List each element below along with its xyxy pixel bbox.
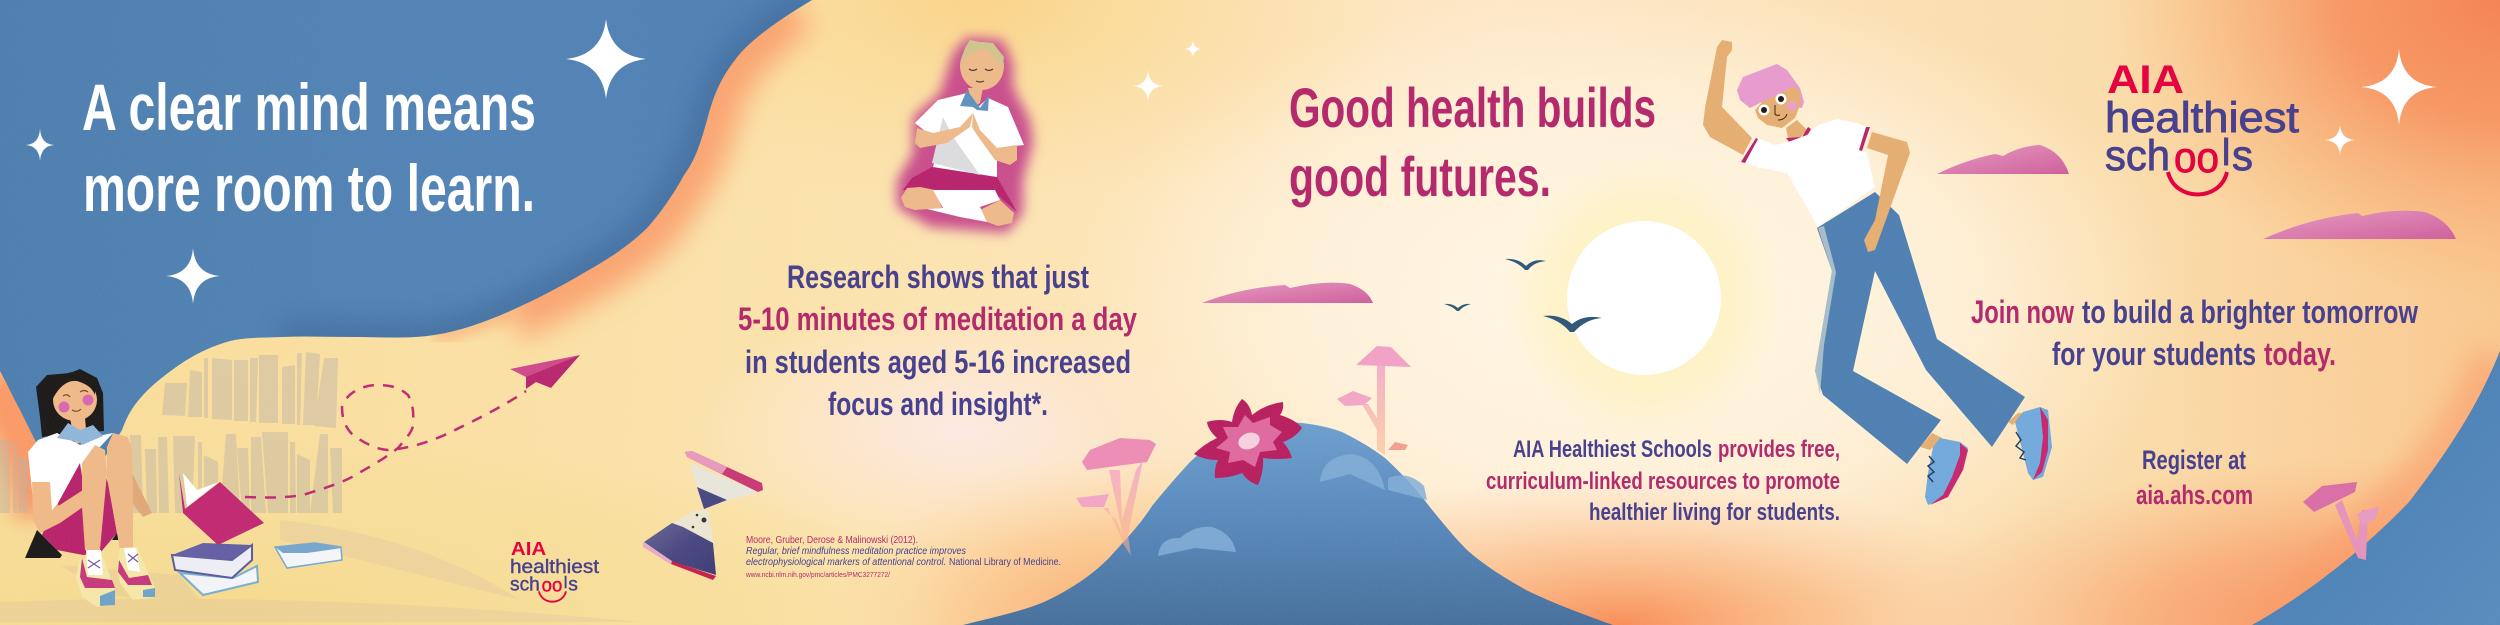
citation: Regular, brief mindfulness meditation practice improves xyxy=(746,546,966,557)
text block: provides: provides free, xyxy=(1718,436,1840,463)
illustration: hourglass xyxy=(643,451,763,580)
title: clear mind: more room to learn. xyxy=(83,151,535,225)
hill rocks xyxy=(1158,454,1427,556)
mushroom tree left of hill xyxy=(1076,438,1156,556)
illustration: meditating boy xyxy=(897,37,1033,233)
text block: research: Research shows that just xyxy=(787,259,1089,295)
illustration: seated girl xyxy=(25,369,155,607)
mushroom tree right of hill xyxy=(1337,346,1411,455)
logo: large: oo xyxy=(2174,134,2219,182)
logo: small: sch xyxy=(510,573,540,595)
logo: small: AIA xyxy=(511,538,546,559)
text block: research: focus and insight*. xyxy=(828,386,1048,422)
stars xyxy=(26,19,2437,304)
icon: lotus flower xyxy=(1194,399,1302,485)
logo: small: s xyxy=(568,573,578,595)
text block: research: 5-10 minutes of meditation a day xyxy=(738,301,1137,337)
text block: join now: to build a brighter tomorrow xyxy=(2082,294,2418,330)
logo: large: sch xyxy=(2105,132,2170,180)
icon: paper plane xyxy=(510,355,580,389)
title: good health xyxy=(1289,76,1656,208)
text block: join now: Join now xyxy=(1971,294,2074,330)
text block: research: in students aged 5-16 increased xyxy=(745,344,1131,380)
text block: register: Register at xyxy=(2142,445,2246,475)
logo: small xyxy=(510,538,600,602)
title: good health: Good health builds xyxy=(1289,76,1656,139)
blue wave top left xyxy=(0,0,820,470)
text block: research xyxy=(738,259,1137,422)
title: clear mind: A clear mind means xyxy=(82,70,536,144)
arrow: dashed flight path xyxy=(245,385,526,498)
central blue hill xyxy=(963,422,1613,625)
logo: large: l xyxy=(2222,132,2230,173)
right blue hill xyxy=(2252,351,2500,625)
logo: large: s xyxy=(2232,132,2253,180)
text block: provides: healthier living for students. xyxy=(1589,499,1840,526)
sun xyxy=(1529,183,1759,413)
citation: Moore, Gruber, Derose & Malinowski (2012). xyxy=(746,535,918,546)
text block: join now: for your students xyxy=(2052,336,2256,372)
illustration: books xyxy=(172,473,342,595)
logo: large xyxy=(2105,58,2299,194)
title: good health: good futures. xyxy=(1289,145,1551,208)
ground brush strokes xyxy=(0,520,640,622)
citation: electrophysiological markers of attentional control. xyxy=(746,557,946,568)
logo: small: healthiest xyxy=(510,556,600,578)
illustration: jumping student xyxy=(1703,40,2052,505)
logo: small: l xyxy=(564,573,567,592)
citation: www.ncbi.nlm.nih.gov/pmc/articles/PMC3277272/ xyxy=(745,572,890,579)
mushroom tree right edge xyxy=(2303,482,2379,560)
birds xyxy=(1444,259,1602,332)
bookshelf silhouette xyxy=(0,352,342,513)
text block: join now xyxy=(1971,294,2418,372)
clouds xyxy=(1202,145,2456,303)
citation: National Library of Medicine. xyxy=(949,557,1061,568)
citation xyxy=(745,535,1061,579)
title: clear mind xyxy=(82,70,536,225)
text block: register: aia.ahs.com xyxy=(2136,480,2253,510)
text block: provides xyxy=(1486,436,1840,526)
logo: large: healthiest xyxy=(2105,94,2299,142)
text block: join now: today. xyxy=(2264,336,2336,372)
logo: large: AIA xyxy=(2107,58,2184,102)
logo: small: oo xyxy=(542,574,562,596)
text block: register xyxy=(2136,445,2253,510)
text block: provides: AIA Healthiest Schools xyxy=(1513,436,1712,463)
text block: provides: curriculum-linked resources to promote xyxy=(1486,468,1840,495)
